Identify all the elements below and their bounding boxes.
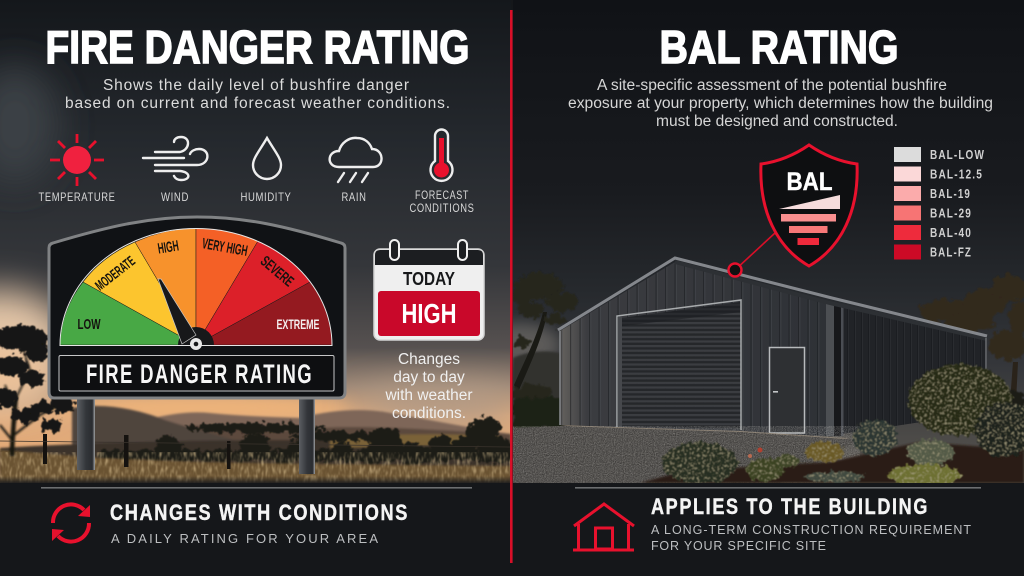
icon: BAL shield: [761, 145, 857, 266]
text: long-term requirement: [651, 523, 971, 553]
icon: thermometer: [430, 130, 452, 181]
corner flashing: [826, 302, 834, 436]
gravel driveway: [513, 426, 860, 483]
title: fire danger rating: FIRE DANGER RATING: [46, 21, 470, 73]
text: BAL description: [568, 77, 993, 130]
panel: right footer: [512, 483, 1024, 576]
left tree: [512, 273, 578, 404]
hill: [513, 351, 565, 430]
legend: BAL levels: BAL-12.5: [930, 168, 983, 182]
calendar: today high: TODAY: [403, 269, 455, 289]
side wall: [844, 308, 987, 434]
panel: left fire danger background scene: [0, 0, 520, 483]
gauge: labels: HIGH: [157, 238, 180, 258]
heading: changes with conditions: CHANGES WITH CONDITIONS: [110, 500, 409, 525]
icon: water drop: [253, 138, 281, 179]
legend: BAL levels: [894, 147, 985, 260]
text: changes day to day: with weather: [384, 387, 473, 404]
right trees: [919, 275, 1024, 360]
legend: BAL levels: BAL-LOW: [930, 148, 985, 162]
text: BAL description: exposure at your property, which determines how the building: [568, 95, 993, 112]
labels: weather factors: RAIN: [342, 190, 366, 204]
text: BAL description: A site-specific assessment of the potential bushfire: [597, 77, 947, 94]
gauge: labels: [78, 235, 320, 333]
gauge: outline: [60, 228, 332, 346]
labels: weather factors: TEMPERATURE: [38, 190, 116, 204]
sign: label bar: [59, 356, 334, 391]
text: changes day to day: Changes: [398, 351, 460, 368]
icon: refresh arrows: [52, 504, 90, 542]
text: BAL description: must be designed and constructed.: [656, 113, 898, 130]
labels: weather factors: FORECAST: [415, 188, 469, 202]
gable wall: [560, 262, 829, 436]
roof edge: [675, 262, 987, 339]
fence posts: [0, 434, 511, 469]
slab: [560, 425, 850, 439]
labels: weather factors: CONDITIONS: [410, 201, 474, 215]
distant hills: [0, 406, 511, 483]
distant tree line: [100, 417, 511, 467]
callout: connector line: [728, 233, 775, 276]
text: long-term requirement: A LONG-TERM CONSTRUCTION REQUIREMENT: [651, 523, 971, 537]
text: long-term requirement: FOR YOUR SPECIFIC SITE: [651, 539, 826, 553]
gauge: labels: LOW: [78, 316, 101, 333]
labels: weather factors: WIND: [161, 190, 189, 204]
gauge: needle and hub: [158, 279, 214, 350]
icon: house: [573, 504, 634, 550]
sign posts: [77, 398, 315, 474]
labels: weather factors: [38, 188, 474, 215]
panel: right BAL background scene: [513, 215, 1024, 483]
legend: BAL levels: BAL-40: [930, 226, 972, 240]
icon: BAL shield: BAL: [786, 168, 832, 196]
roller door: [622, 302, 741, 429]
text: changes day to day: day to day: [393, 369, 465, 386]
icon: rain cloud: [330, 138, 382, 182]
panel: left footer: [0, 483, 512, 576]
garden shrubs: [640, 442, 1024, 483]
sign: label bar: FIRE DANGER RATING: [86, 359, 313, 389]
heading: applies to the building: APPLIES TO THE BUILDING: [651, 494, 929, 519]
divider: centre red line: [510, 10, 513, 563]
text: fire danger description: [65, 77, 450, 112]
ground grass: [0, 450, 511, 483]
gauge: labels: VERY HIGH: [201, 235, 249, 260]
text: fire danger description: based on current and forecast weather conditions.: [65, 95, 450, 112]
text: changes day to day: [384, 351, 473, 422]
door: [770, 348, 804, 433]
legend: BAL levels: BAL-19: [930, 187, 971, 201]
icon: sun temperature: [50, 134, 104, 186]
gauge: wedges: [60, 228, 332, 345]
panel: fire danger sign: [49, 217, 345, 398]
left gum tree: [0, 325, 75, 456]
text: changes day to day: conditions.: [392, 405, 466, 422]
legend: BAL levels: BAL-FZ: [930, 246, 972, 260]
calendar: today high: HIGH: [402, 298, 456, 329]
title: BAL rating: BAL RATING: [660, 21, 898, 73]
shed building: [558, 258, 987, 441]
text: fire danger description: Shows the daily level of bushfire danger: [103, 77, 409, 94]
calendar: today high: [374, 240, 484, 340]
text: daily rating: A DAILY RATING FOR YOUR AREA: [111, 531, 378, 546]
labels: weather factors: HUMIDITY: [240, 190, 292, 204]
gauge: labels: SEVERE: [257, 253, 297, 290]
legend: BAL levels: BAL-29: [930, 206, 972, 220]
gauge: labels: MODERATE: [92, 253, 138, 294]
gauge: labels: EXTREME: [276, 316, 320, 332]
icon: wind: [143, 137, 207, 180]
